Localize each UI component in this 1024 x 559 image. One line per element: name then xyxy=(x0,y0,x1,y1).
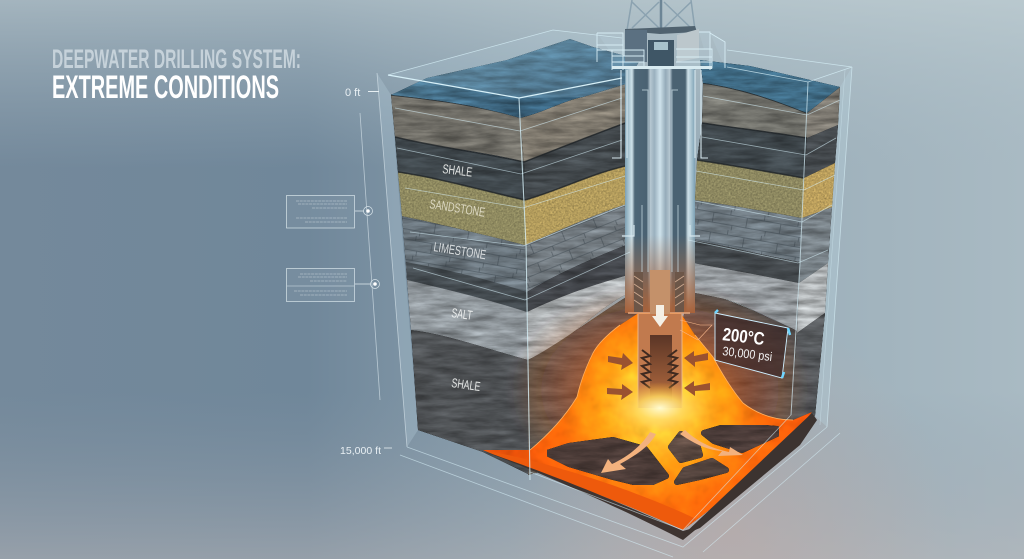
rock block: right end face layers xyxy=(790,87,840,425)
layer labels: SANDSTONE xyxy=(429,196,486,220)
layer labels: LIMESTONE xyxy=(433,239,487,262)
depth axis with scale labels: 15,000 ft xyxy=(340,445,381,457)
title: EXTREME CONDITIONS xyxy=(52,69,279,105)
rock block: left face layers xyxy=(391,95,530,475)
flow arrows xyxy=(601,430,743,473)
transparent glass box outline xyxy=(388,30,852,557)
glass side panel right xyxy=(815,67,852,427)
layer labels xyxy=(429,161,487,394)
layer labels: SHALE xyxy=(442,161,473,180)
rock block: centre face layers xyxy=(520,84,660,475)
glass side panels xyxy=(377,73,418,447)
layer labels: SHALE xyxy=(451,375,482,394)
callout: temperature and pressure: 200°C xyxy=(722,324,766,349)
callout: temperature and pressure: 30,000 psi xyxy=(722,344,773,364)
callout box: upper annotation xyxy=(286,196,372,228)
callout: temperature and pressure xyxy=(680,310,790,378)
title: DEEPWATER DRILLING SYSTEM: xyxy=(52,44,301,74)
title xyxy=(52,44,301,105)
wellbore casing xyxy=(612,68,708,313)
rig platform and derrick xyxy=(597,0,725,70)
rock block: right-of-well face layers xyxy=(680,83,807,420)
layer labels: SALT xyxy=(451,305,473,323)
arrow: downward circulation xyxy=(652,305,668,327)
drill bit xyxy=(610,270,710,434)
cooled rock slabs on the floor xyxy=(547,425,779,485)
molten lava zone xyxy=(483,285,817,540)
depth axis with scale labels: 0 ft xyxy=(345,87,360,99)
callout box: lower annotation xyxy=(286,268,380,302)
depth axis with scale labels xyxy=(340,73,407,457)
water surface xyxy=(388,30,840,118)
pressure arrows xyxy=(607,351,710,400)
